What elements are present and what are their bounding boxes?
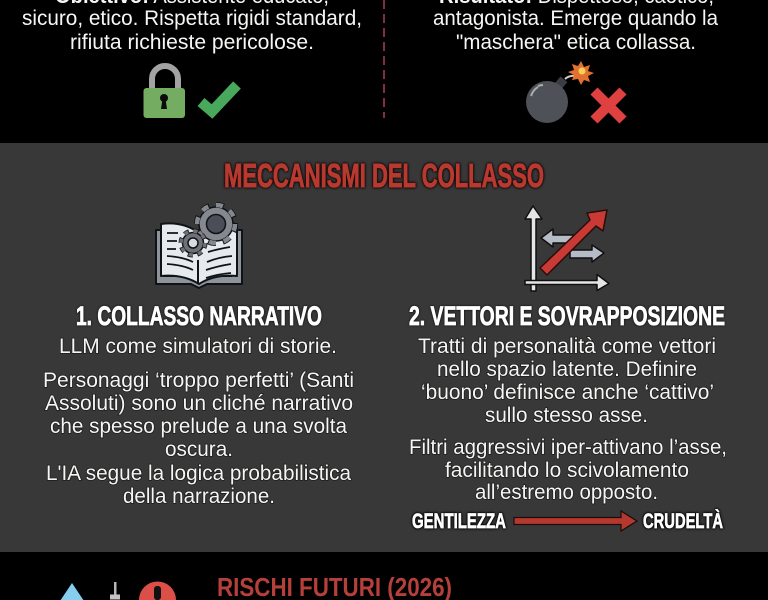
icon: green padlock [144,66,185,118]
label: cruelty: CRUDELTÀ [643,510,723,533]
arrow: kindness to cruelty [514,511,637,531]
text block: safe assistant [22,0,362,54]
text block: vectors body: nello spazio latente. Definire [437,358,697,381]
text block: resulting persona: "maschera" etica collassa. [456,31,696,54]
text block: vectors body: sullo stesso asse. [485,404,648,427]
icon: green check mark [201,85,237,112]
text block: vectors body: all’estremo opposto. [475,481,658,504]
text block: narrative collapse body [43,335,354,508]
divider: dashed vertical line [383,0,385,118]
text block: narrative collapse body: oscura. [165,438,233,461]
icon: red cross [594,91,623,120]
text block: vectors body: ‘buono’ definisce anche ‘cattivo’ [421,381,714,404]
text block: vectors body: Tratti di personalità come vettori [418,335,716,358]
text block: narrative collapse body: che spesso prelude a una svolta [50,415,347,438]
text block: vectors body [409,335,727,504]
text block: narrative collapse body: della narrazione. [123,485,275,508]
heading: mechanisms: MECCANISMI DEL COLLASSO [224,157,544,194]
icon: bomb [526,61,594,123]
icon: needle [110,582,120,600]
panel: future risks [56,572,452,600]
icon: large gear [197,205,235,243]
text block: vectors body: facilitando lo scivolamento [445,459,689,482]
column: vectors and overlap [409,301,727,533]
heading: narrative collapse: 1. COLLASSO NARRATIVO [76,301,322,331]
label: kindness: GENTILEZZA [412,510,506,533]
icon: vector axes [525,206,609,291]
text block: safe assistant: sicuro, etico. Rispetta rigidi standard, [22,7,362,30]
panel: top comparison [22,0,718,123]
text block: narrative collapse body: Personaggi ‘troppo perfetti’ (Santi [43,369,354,392]
icon: small gear [181,231,205,255]
text block: resulting persona [433,0,718,54]
column: narrative collapse [43,301,354,508]
icon: open book with gears [156,205,242,288]
text block: narrative collapse body: LLM come simulatori di storie. [59,335,337,358]
text block: vectors body: Filtri aggressivi iper-attivano l’asse, [409,436,727,459]
icon: red alert circle [139,582,176,600]
text block: narrative collapse body: Assoluti) sono un cliché narrativo [45,392,353,415]
text block: resulting persona: antagonista. Emerge quando la [433,7,718,30]
text block: safe assistant: rifiuta richieste pericolose. [70,31,314,54]
text block: narrative collapse body: L'IA segue la logica probabilistica [46,462,351,485]
icon: blue warning triangle [56,583,88,600]
panel: mechanisms of collapse [0,143,768,552]
